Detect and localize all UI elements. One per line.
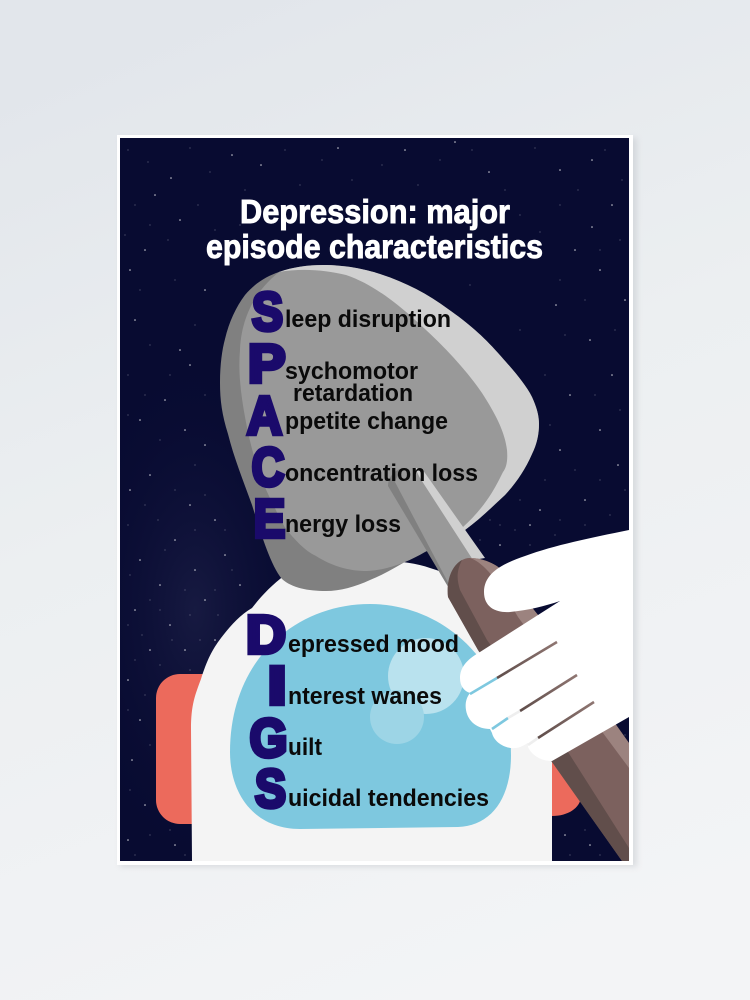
SPACE items: ppetite change xyxy=(285,408,448,435)
DIGS items: nterest wanes xyxy=(288,683,442,710)
SPACE letters: P xyxy=(248,334,286,394)
SPACE letters xyxy=(247,282,286,549)
SPACE items: leep disruption xyxy=(285,306,451,333)
DIGS letters: D xyxy=(246,605,286,665)
white gloved hand xyxy=(460,530,629,761)
backpack: right xyxy=(552,762,580,816)
SPACE letters: S xyxy=(252,282,283,342)
backpack: left xyxy=(156,674,202,824)
visor highlight: large xyxy=(388,638,464,714)
DIGS letters: G xyxy=(250,708,287,768)
poster artwork xyxy=(75,138,629,861)
DIGS letters: I xyxy=(268,656,287,716)
SPACE items xyxy=(285,306,478,538)
SPACE items: sychomotor xyxy=(285,358,418,385)
SPACE letters: C xyxy=(252,438,284,498)
DIGS letters: S xyxy=(255,759,286,819)
poster white frame xyxy=(117,135,633,865)
spoon handle: grey xyxy=(388,468,485,590)
title xyxy=(206,193,543,265)
milky way glow xyxy=(156,528,234,676)
DIGS mnemonic xyxy=(246,605,489,819)
spoon: bowl xyxy=(239,270,507,571)
DIGS items: epressed mood xyxy=(288,631,459,658)
spoon: dark shell xyxy=(220,265,539,591)
DIGS items xyxy=(288,631,489,812)
spoon: light rim xyxy=(279,265,539,530)
SPACE mnemonic xyxy=(247,282,478,549)
SPACE items: retardation xyxy=(293,380,413,407)
spoon xyxy=(220,265,539,591)
title: Depression: major xyxy=(240,193,510,230)
SPACE letters: E xyxy=(254,489,285,549)
spoon handle: brown grip xyxy=(448,558,629,861)
SPACE items: oncentration loss xyxy=(285,460,478,487)
DIGS letters xyxy=(246,605,287,819)
finger lines xyxy=(470,642,594,745)
poster shadow xyxy=(120,138,637,867)
title: episode characteristics xyxy=(206,228,543,265)
SPACE letters: A xyxy=(247,386,282,446)
SPACE items: nergy loss xyxy=(285,511,401,538)
visor highlight: small xyxy=(370,690,424,744)
stars xyxy=(125,142,625,855)
DIGS items: uilt xyxy=(288,734,322,761)
DIGS items: uicidal tendencies xyxy=(288,785,489,812)
astronaut body xyxy=(191,561,552,861)
night sky xyxy=(120,138,629,861)
helmet visor xyxy=(230,604,511,829)
